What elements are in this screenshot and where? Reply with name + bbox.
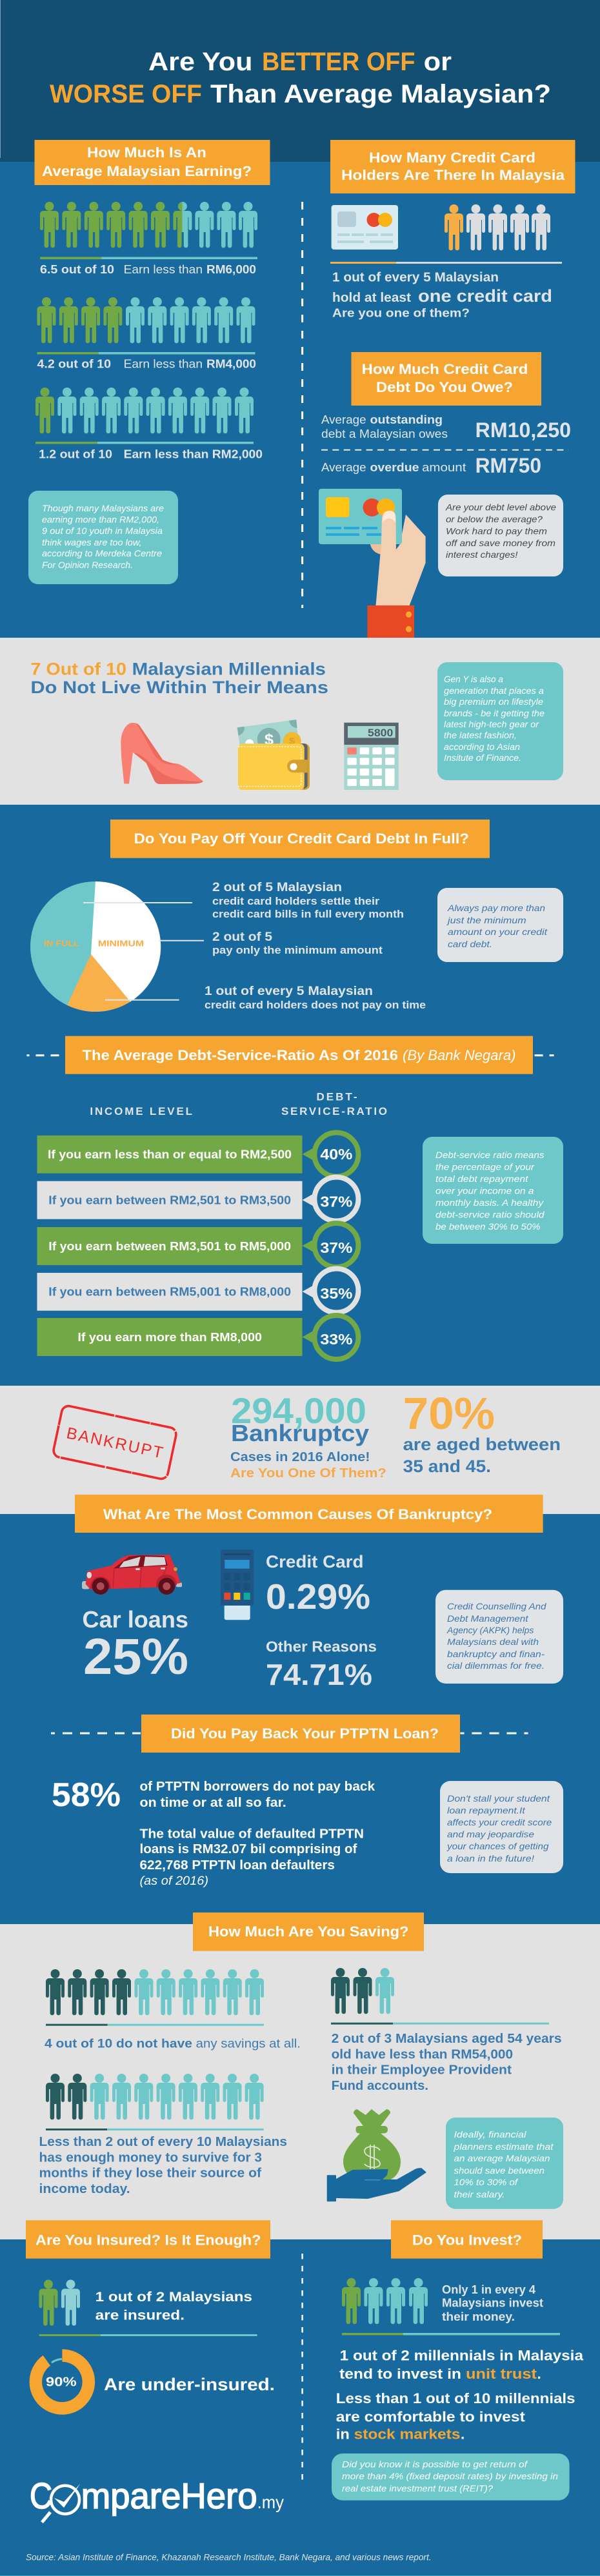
callout: debt service ratio meaning: Debt-service ratio means [435,1150,545,1160]
callout: pay more than minimum: Always pay more than [447,903,545,913]
title: Are You [148,48,253,76]
text: settle in full: 2 out of 5 Malaysian [212,880,342,894]
text: employee provident fund: 2 out of 3 Malaysians aged 54 years [332,2032,562,2046]
callout: pay more than minimum: amount on your credit [448,927,548,937]
text: one credit card: Are you one of them? [332,306,470,320]
row: RM2,501 to RM3,500: 37% [320,1194,352,1210]
icon: card terminal [221,1549,254,1620]
stat: other reasons 74.71 percent: Other Reasons [266,1638,377,1655]
text: unit trust: unit trust [466,2366,537,2382]
row: RM5,001 to RM8,000 [37,1269,358,1313]
stat: outstanding debt: debt a Malaysian owes [321,427,448,440]
stat: 70 percent aged 35 to 45: are aged between [403,1435,561,1454]
callout: save 10 to 30 percent: an average Malaysian [454,2153,550,2163]
title [50,48,551,108]
heading: are you insured: Are You Insured? Is It Enough? [35,2232,261,2248]
stat: 58 percent: 58% [52,1776,121,1814]
logo: CompareHero.my: .my [257,2492,284,2512]
text: employee provident fund: Fund accounts. [332,2079,428,2093]
callout: wages too low: 9 out of 10 youth in Malaysia [42,526,163,536]
stat: 58 percent [52,1776,375,1814]
row: more than RM8,000: 33% [320,1331,352,1348]
table headers: SERVICE-RATIO [281,1105,387,1117]
stat: 70 percent aged 35 to 45: 70% [403,1388,495,1439]
stat: overdue amount: Average [321,460,366,474]
heading: how much is an average Malaysian earning: Average Malaysian Earning? [42,163,252,179]
callout: gen Y: big premium on lifestyle [444,696,543,707]
pictogram: 2 out of 3 [331,1968,549,2025]
callout: debt service ratio meaning: be between 30% to 50% [435,1221,541,1232]
stat: overdue amount: overdue [370,460,419,474]
callout: REIT: Did you know it is possible to get return of [342,2459,528,2470]
panel: insurance [26,2220,275,2408]
panel: investing [332,2220,584,2501]
panel: bankruptcy stats [52,1388,561,1480]
stat: 58 percent: on time or at all so far. [139,1796,286,1810]
text: not on time: credit card holders does not pay on time [205,999,426,1011]
label: 4.2 out of 10: Earn less than [124,358,203,371]
stat: outstanding debt: RM10,250 [475,418,571,442]
callout: save 10 to 30 percent [446,2118,563,2209]
text: unit trust: . [537,2366,541,2382]
callout: debt service ratio meaning: the percentage of your [435,1162,535,1172]
label: 6.5 out of 10 [40,263,256,276]
callout: gen Y: latest high-tech gear or [444,719,539,729]
label: 4.2 out of 10 [37,358,256,371]
row: RM2,501 to RM3,500 [37,1177,358,1221]
heading: do you pay off in full [110,820,490,858]
callout: wages too low: Though many Malaysians are [42,503,164,513]
panel: millennials [30,660,563,790]
text: survive for 3 months: Less than 2 out of every 10 Malaysians [39,2135,287,2149]
text: total value of defaulted loans: The total value of defaulted PTPTN [139,1827,364,1842]
heading: how much credit card debt: How Much Credit Card [361,361,528,377]
row: RM5,001 to RM8,000: 35% [320,1285,352,1302]
callout: student loan repayment: Don't stall your student [447,1793,550,1804]
pictogram: 4 out of 10 [46,1969,264,2026]
callout: REIT: more than 4% (fixed deposit rates) by investing in [342,2471,558,2481]
heading: do you pay off in full: Do You Pay Off Your Credit Card Debt In Full? [134,831,469,847]
icon: wallet with money [237,720,310,790]
callout: AKPK: Debt Management [447,1613,529,1624]
text: total value of defaulted loans: (as of 2016) [139,1874,208,1888]
text: settle in full: credit card bills in full every month [212,908,404,920]
text: settle in full: credit card holders settle their [212,895,379,907]
title: or [424,48,452,76]
row: more than RM8,000 [37,1315,358,1359]
logo: CompareHero.my: mpareHero [81,2475,257,2516]
stat: 294,000 bankruptcy cases: 294,000 [231,1390,366,1431]
heading: how many credit card holders: How Many Credit Card [369,150,535,166]
text: employee provident fund [332,2032,562,2093]
source note: Source: Asian Institute of Finance, Khazanah Research Institute, Bank Negara, and various news report. [26,2552,431,2562]
callout: debt service ratio meaning: over your income on a [435,1186,534,1196]
stat: 294,000 bankruptcy cases: Are You One Of Them? [230,1466,386,1480]
text: minimum amount [212,930,383,956]
row: up to RM2,500: If you earn less than or equal to RM2,500 [48,1148,292,1161]
pictogram: 1 in 5 [330,204,562,264]
text: one credit card: 1 out of every 5 Malaysian [332,270,499,285]
panel: credit card holders [330,140,575,320]
row: RM3,501 to RM5,000: If you earn between RM3,501 to RM5,000 [48,1239,291,1253]
row: RM2,501 to RM3,500: If you earn between RM2,501 to RM3,500 [48,1193,291,1206]
text: one credit card: one credit card [418,286,552,306]
callout: gen Y: Gen Y is also a [444,674,503,684]
stat: 294,000 bankruptcy cases: Bankruptcy [231,1420,369,1446]
callout: AKPK: Credit Counselling And [447,1601,547,1611]
callout: student loan repayment: loan repayment.It [447,1805,526,1816]
text: survive for 3 months: has enough money to survive for 3 [39,2151,262,2165]
heading: how many credit card holders: Holders Are There In Malaysia [341,167,565,183]
text: are under-insured: Are under-insured. [104,2375,275,2394]
donut chart: 90 percent under-insured: 90% [46,2375,77,2390]
table headers [90,1091,387,1117]
callout: wages too low: think wages are too low, [42,537,142,547]
text: 1 out of 2 insured [95,2289,252,2323]
heading: how much is an average Malaysian earning: How Much Is An [87,144,206,161]
text: unit trust: tend to invest in [339,2366,461,2382]
text: survive for 3 months [39,2135,287,2196]
panel: average earnings [28,140,270,584]
stat: overdue amount: amount [422,460,466,474]
heading: did you pay back PTPTN: Did You Pay Back Your PTPTN Loan? [171,1726,439,1742]
icon: bankrupt stamp: BANKRUPT [65,1424,165,1462]
callout: REIT: real estate investment trust (REIT)? [342,2483,493,2493]
row: more than RM8,000: If you earn more than RM8,000 [77,1330,262,1344]
stat: credit card 0.29 percent: 0.29% [266,1577,370,1617]
heading: do you invest: Do You Invest? [412,2232,522,2248]
stat: 294,000 bankruptcy cases [230,1390,386,1480]
icon: hand holding credit card [319,489,426,638]
callout: wages too low [28,491,178,584]
pictogram: 2 out of 10 [46,2074,264,2130]
callout: pay more than minimum [437,888,563,962]
heading: common causes of bankruptcy [75,1495,543,1533]
heading: are you insured [26,2220,270,2259]
stat: credit card 0.29 percent [266,1552,370,1617]
pictogram: 1 out of 2 [39,2280,257,2336]
text: total value of defaulted loans [139,1827,364,1888]
leader lines [83,903,204,1000]
callout: debt service ratio meaning: debt-service ratio should [435,1210,545,1220]
stat: 294,000 bankruptcy cases: Cases in 2016 Alone! [230,1450,370,1464]
callout: gen Y: generation that places a [444,685,544,696]
callout: student loan repayment: and may jeopardise [447,1829,534,1840]
callout: student loan repayment [440,1781,563,1873]
stat: car loans 25 percent: 25% [83,1627,188,1685]
label: 4.2 out of 10: 4.2 out of 10 [37,358,111,371]
icon: high heel shoe [121,723,203,784]
stat: overdue amount [321,454,541,477]
stat: other reasons 74.71 percent: 74.71% [266,1658,372,1691]
callout: debt level [438,495,563,576]
text: 1 out of 2 insured: are insured. [95,2308,185,2323]
callout: debt service ratio meaning [423,1137,563,1244]
callout: student loan repayment: your chances of getting [446,1841,549,1851]
heading: did you pay back PTPTN [141,1715,460,1753]
panel: savings [39,1912,563,2209]
text: 1 in 4 invest [442,2283,543,2323]
callout: save 10 to 30 percent: Ideally, financial [454,2129,527,2139]
heading: average debt service ratio: (By Bank Negara) [403,1047,516,1063]
callout: debt level: interest charges! [446,549,518,560]
text: survive for 3 months: months if they lose their source of [39,2167,261,2181]
text: employee provident fund: in their Employee Provident [332,2063,512,2078]
callout: gen Y: Insitute of Finance. [444,752,521,763]
text: one credit card [332,270,552,320]
donut chart: 90 percent under-insured [35,2355,88,2408]
table headers: DEBT- [316,1091,357,1103]
stat: credit card 0.29 percent: Credit Card [266,1552,364,1571]
text: unit trust [339,2348,584,2382]
title: BETTER OFF [262,48,415,76]
stat: outstanding debt: Average [321,413,366,426]
heading: common causes of bankruptcy: What Are The Most Common Causes Of Bankruptcy? [103,1506,492,1522]
text: minimum amount: 2 out of 5 [212,930,272,944]
label: 4.2 out of 10: RM4,000 [206,358,256,371]
heading: how much are you saving [193,1912,424,1951]
icon: bankrupt stamp [52,1405,177,1480]
callout: save 10 to 30 percent: planners estimate that [453,2141,554,2152]
callout: debt level: off and save money from [446,538,555,548]
callout: gen Y: the latest fashion, [444,730,517,740]
callout: save 10 to 30 percent: 10% to 30% of [454,2177,519,2187]
label: 6.5 out of 10: 6.5 out of 10 [40,263,114,276]
callout: save 10 to 30 percent: should save between [454,2165,545,2176]
row: up to RM2,500 [37,1132,358,1176]
text: 1 in 4 invest: Only 1 in every 4 [442,2283,535,2296]
callout: pay more than minimum: card debt. [448,939,492,949]
text: minimum amount: pay only the minimum amount [212,944,383,956]
stat: 58 percent: of PTPTN borrowers do not pay back [139,1780,375,1794]
stat: 70 percent aged 35 to 45 [403,1388,561,1476]
heading: average debt service ratio [65,1036,533,1074]
panel: causes of bankruptcy [75,1495,563,1691]
text: survive for 3 months: income today. [39,2182,130,2196]
text: no savings: 4 out of 10 do not have [45,2037,192,2051]
text: total value of defaulted loans: 622,768 PTPTN loan defaulters [139,1858,335,1873]
callout: debt service ratio meaning: total debt repayment [435,1174,529,1184]
label: 1.2 out of 10 [39,448,263,461]
title: Than Average Malaysian? [210,80,551,108]
icon: red car [82,1555,182,1595]
heading: 7 out of 10 millennials [30,660,328,697]
icon: credit card [332,205,398,250]
icon: wallet with money: $ [289,736,295,747]
text: no savings: any savings at all. [196,2037,301,2051]
text: stock markets: stock markets [354,2426,461,2443]
stat: other reasons 74.71 percent [266,1638,377,1691]
callout: AKPK: Agency (AKPK) helps [446,1625,534,1635]
callout: pay more than minimum: just the minimum [446,915,526,925]
icon: calculator: 5800 [368,727,393,739]
text: no savings [45,2037,301,2051]
heading: how much are you saving: How Much Are You Saving? [208,1923,409,1940]
text: stock markets: . [461,2426,465,2443]
icon: hand with money bag [327,2109,426,2201]
callout: wages too low: For Opinion Research. [42,560,133,570]
pie chart [30,881,161,1012]
label: 6.5 out of 10: Earn less than [124,263,203,276]
pictogram: 1 in 4 [342,2278,560,2335]
text: one credit card: hold at least [332,290,411,305]
stat: outstanding debt [321,413,571,442]
icon: calculator [344,723,399,790]
panel: debt service ratio [27,1036,563,1359]
stat: car loans 25 percent: Car loans [83,1606,188,1633]
pictogram: 6.5 out of 10 [40,202,257,259]
text: not on time: 1 out of every 5 Malaysian [205,985,373,998]
pictogram: 4.2 out of 10 [37,297,255,355]
callout: AKPK: bankruptcy and finan- [447,1649,545,1659]
pie chart: MINIMUM [98,939,144,949]
stat: outstanding debt: outstanding [370,413,443,426]
text: total value of defaulted loans: loans is RM32.07 bil comprising of [139,1842,357,1856]
heading: how much credit card debt: Debt Do You Owe? [376,379,513,395]
callout: REIT [332,2453,570,2501]
callout: student loan repayment: affects your credit score [447,1817,552,1827]
text: stock markets: Less than 1 out of 10 millennials [336,2390,575,2406]
heading: how many credit card holders [330,140,575,193]
text: stock markets: in [336,2426,350,2443]
row: RM3,501 to RM5,000 [37,1223,358,1267]
row: RM3,501 to RM5,000: 37% [320,1239,352,1256]
logo: CompareHero.my: C [30,2475,52,2517]
heading: 7 out of 10 millennials: 7 Out of 10 [30,660,126,679]
heading: how much credit card debt [351,352,541,406]
text: stock markets [336,2390,575,2443]
heading: do you invest [391,2220,543,2259]
callout: gen Y [437,662,563,780]
heading: how much is an average Malaysian earning [35,140,270,185]
text: 1 out of 2 insured: 1 out of 2 Malaysians [95,2289,252,2305]
text: not on time [205,985,426,1011]
stat: 70 percent aged 35 to 45: 35 and 45. [403,1457,491,1476]
table headers: INCOME LEVEL [90,1105,192,1117]
callout: AKPK: Malaysians deal with [447,1637,539,1647]
label: 1.2 out of 10: 1.2 out of 10 [39,448,112,461]
heading: 7 out of 10 millennials: Malaysian Millennials [132,660,326,679]
callout: debt level: or below the average? [446,514,543,524]
icon: wallet with money: $ [265,731,274,749]
label: 6.5 out of 10: RM6,000 [206,263,256,276]
panel: paying off credit card debt [30,820,563,1012]
heading: 7 out of 10 millennials: Do Not Live Within Their Means [30,678,328,697]
text: 1 in 4 invest: their money. [442,2310,515,2323]
callout: wages too low: earning more than RM2,000, [42,515,159,525]
title: WORSE OFF [50,80,202,108]
text: 1 in 4 invest: Malaysians invest [442,2297,543,2310]
text: employee provident fund: old have less than RM54,000 [332,2048,513,2062]
stat: overdue amount: RM750 [475,454,541,477]
callout: debt level: Work hard to pay them [446,526,547,536]
callout: debt service ratio meaning: monthly basis. A healthy [435,1197,544,1208]
row: RM5,001 to RM8,000: If you earn between RM5,001 to RM8,000 [48,1284,291,1298]
panel: PTPTN loan [51,1715,563,1888]
callout: AKPK [435,1590,563,1684]
text: settle in full [212,880,404,920]
logo: CompareHero.my [30,2475,284,2522]
callout: gen Y: according to Asian [444,742,520,752]
callout: save 10 to 30 percent: their salary. [454,2189,505,2199]
label: 1.2 out of 10: Earn less than RM2,000 [124,448,263,461]
text: unit trust: 1 out of 2 millennials in Malaysia [340,2348,584,2364]
callout: gen Y: brands - be it getting the [444,708,545,718]
callout: AKPK: cial dilemmas for free. [447,1660,545,1671]
pictogram: 1.2 out of 10 [35,388,254,444]
text: stock markets: are comfortable to invest [336,2409,525,2425]
heading: average debt service ratio: The Average Debt-Service-Ratio As Of 2016 [83,1047,398,1063]
callout: wages too low: according to Merdeka Centre [42,548,162,558]
pie chart: IN FULL [44,939,79,949]
panel: credit card debt [319,352,571,638]
callout: debt level: Are your debt level above [445,502,556,513]
callout: student loan repayment: a loan in the future! [447,1853,534,1863]
row: up to RM2,500: 40% [320,1146,352,1163]
